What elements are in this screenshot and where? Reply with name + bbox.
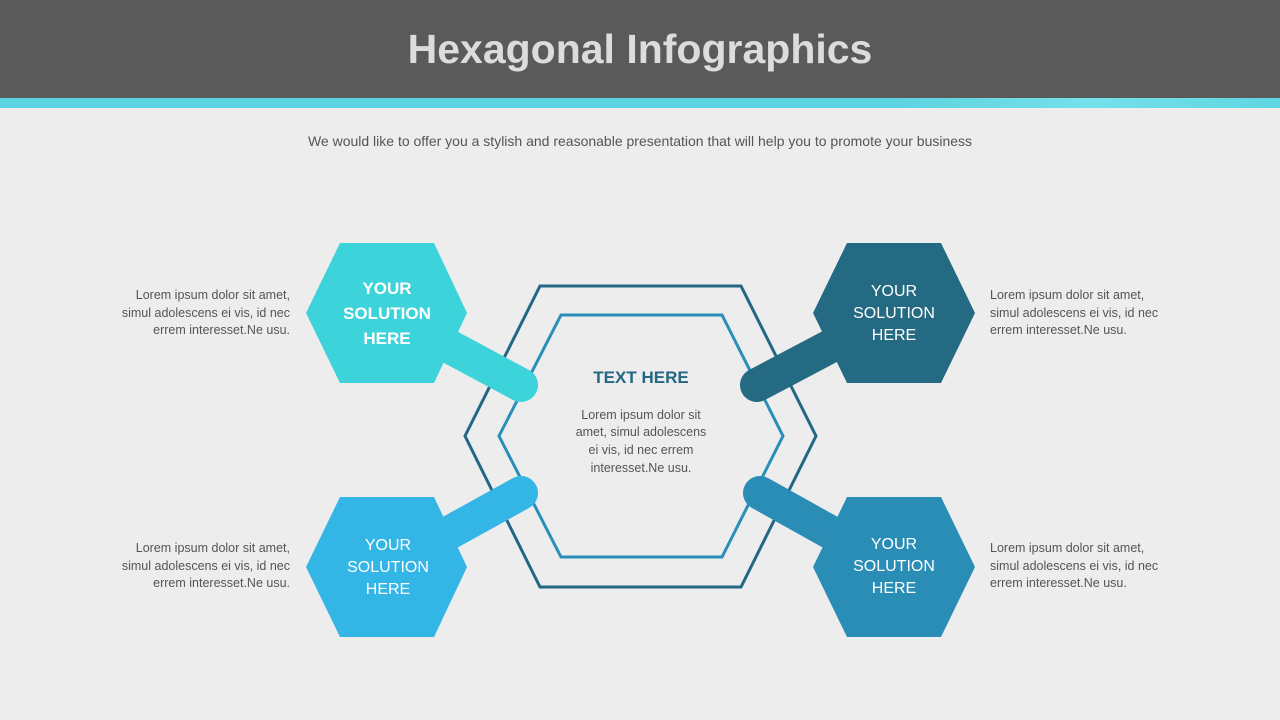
hex: bottom-left: YOUR (365, 537, 411, 554)
hex: bottom-left: HERE (366, 581, 410, 598)
hex: top-left: YOUR (362, 279, 412, 298)
hex: bottom-left (306, 493, 521, 637)
text: top-left: simul adolescens ei vis, id nec (122, 306, 290, 320)
text: top-right: Lorem ipsum dolor sit amet, (990, 288, 1144, 302)
center heading: TEXT HERE (593, 368, 689, 387)
text: top-right: errem interesset.Ne usu. (990, 323, 1127, 337)
hex: bottom-left: SOLUTION (347, 559, 429, 576)
hex: top-right: SOLUTION (853, 305, 935, 322)
center body: Lorem ipsum dolor sit (581, 408, 701, 422)
text: bottom-right (990, 541, 1158, 590)
hex: bottom-right (760, 493, 975, 637)
text: bottom-left: simul adolescens ei vis, id nec (122, 558, 290, 572)
header (0, 0, 1280, 98)
hex: bottom-right: HERE (872, 580, 916, 597)
hex: top-left (306, 243, 521, 385)
header: Hexagonal Infographics (408, 26, 872, 72)
text: bottom-right: simul adolescens ei vis, id nec (990, 558, 1158, 572)
text: top-left: Lorem ipsum dolor sit amet, (136, 288, 290, 302)
text: bottom-right: Lorem ipsum dolor sit amet, (990, 541, 1144, 555)
hex: bottom-right: YOUR (871, 536, 917, 553)
hex: top-right: YOUR (871, 283, 917, 300)
subtitle: We would like to offer you a stylish and reasonable presentation that will help you to promote your business (308, 133, 972, 149)
center body: interesset.Ne usu. (591, 461, 691, 475)
text: bottom-left: Lorem ipsum dolor sit amet, (136, 541, 290, 555)
hex: top-right: HERE (872, 327, 916, 344)
accent band (0, 98, 1280, 108)
hex: bottom-right: SOLUTION (853, 558, 935, 575)
text: bottom-left: errem interesset.Ne usu. (153, 576, 290, 590)
hex: top-right (757, 243, 975, 385)
text: top-right: simul adolescens ei vis, id nec (990, 306, 1158, 320)
central inner hexagon (499, 315, 783, 557)
hex: top-left: HERE (363, 329, 411, 348)
text: top-left (122, 288, 290, 337)
text: top-left: errem interesset.Ne usu. (153, 323, 290, 337)
center body: amet, simul adolescens (576, 425, 706, 439)
text: top-right (990, 288, 1158, 337)
text: bottom-left (122, 541, 290, 590)
center body (576, 408, 706, 475)
center body: ei vis, id nec errem (589, 443, 693, 457)
central outer hexagon (465, 286, 816, 587)
hex: top-left: SOLUTION (343, 304, 431, 323)
text: bottom-right: errem interesset.Ne usu. (990, 576, 1127, 590)
